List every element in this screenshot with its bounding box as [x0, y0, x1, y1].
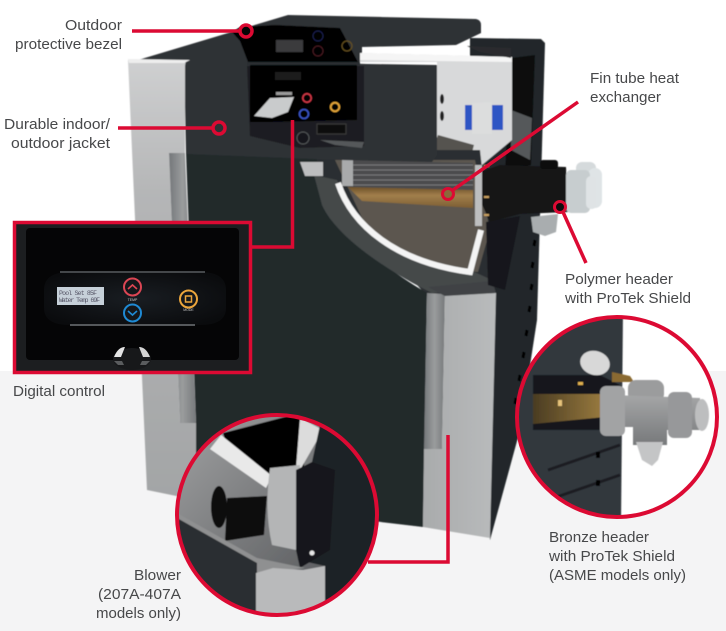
temp down button	[124, 304, 141, 322]
polymer header	[475, 160, 602, 290]
label: outdoor protective bezel	[15, 18, 122, 53]
label: fin tube heat exchanger: exchanger	[590, 90, 661, 106]
blower inset	[175, 413, 379, 617]
heat exchanger interior	[296, 150, 496, 296]
label: blower: models only)	[96, 606, 181, 622]
callout: blower leader	[368, 435, 448, 562]
upper jacket band	[184, 60, 437, 162]
label: fin tube heat exchanger	[590, 71, 679, 106]
LCD display: Pool Set 85F	[59, 290, 97, 297]
label: bronze header: (ASME models only)	[549, 568, 686, 584]
label: outdoor protective bezel: protective bezel	[15, 37, 122, 53]
temp up button	[124, 278, 141, 302]
label: outdoor protective bezel: Outdoor	[65, 18, 122, 34]
top lid	[138, 15, 481, 62]
label: durable jacket	[4, 117, 111, 152]
light left corner	[128, 59, 196, 500]
label: blower	[96, 568, 181, 622]
label: durable jacket: outdoor jacket	[11, 136, 110, 152]
right side panel	[470, 38, 545, 540]
mode button: MODE	[183, 308, 194, 312]
bronze header inset	[510, 310, 717, 525]
label: polymer header: with ProTek Shield	[564, 291, 691, 307]
callout: bezel leader	[132, 25, 252, 37]
label: blower: (207A-407A	[98, 587, 181, 603]
LCD display	[57, 287, 104, 305]
light right column	[423, 281, 496, 538]
latch knob	[113, 347, 151, 370]
hinged bezel	[232, 25, 360, 65]
label: bronze header: Bronze header	[549, 530, 649, 546]
label: polymer header: Polymer header	[565, 272, 673, 288]
heater illustration	[128, 15, 602, 540]
front panel and rim	[186, 153, 492, 527]
label: durable jacket: Durable indoor/	[4, 117, 111, 133]
label: polymer header	[564, 272, 691, 307]
callout: polymer header leader	[554, 202, 586, 263]
label: blower: Blower	[134, 568, 181, 584]
callout: heat exchanger leader	[442, 102, 578, 200]
mounting bracket	[300, 162, 323, 176]
callout: digital control leader	[252, 120, 292, 247]
LCD display: Water Temp 69F	[59, 297, 100, 304]
label: fin tube heat exchanger: Fin tube heat	[590, 71, 679, 87]
temp up button: TEMP	[128, 298, 138, 302]
white internal panel	[360, 46, 512, 165]
label: digital control: Digital control	[13, 384, 105, 400]
mode button	[180, 290, 197, 312]
callout: jacket leader	[118, 122, 225, 134]
label: bronze header: with ProTek Shield	[548, 549, 675, 565]
control housing	[247, 65, 364, 148]
label: bronze header	[548, 530, 686, 584]
digital control inset	[14, 222, 250, 372]
